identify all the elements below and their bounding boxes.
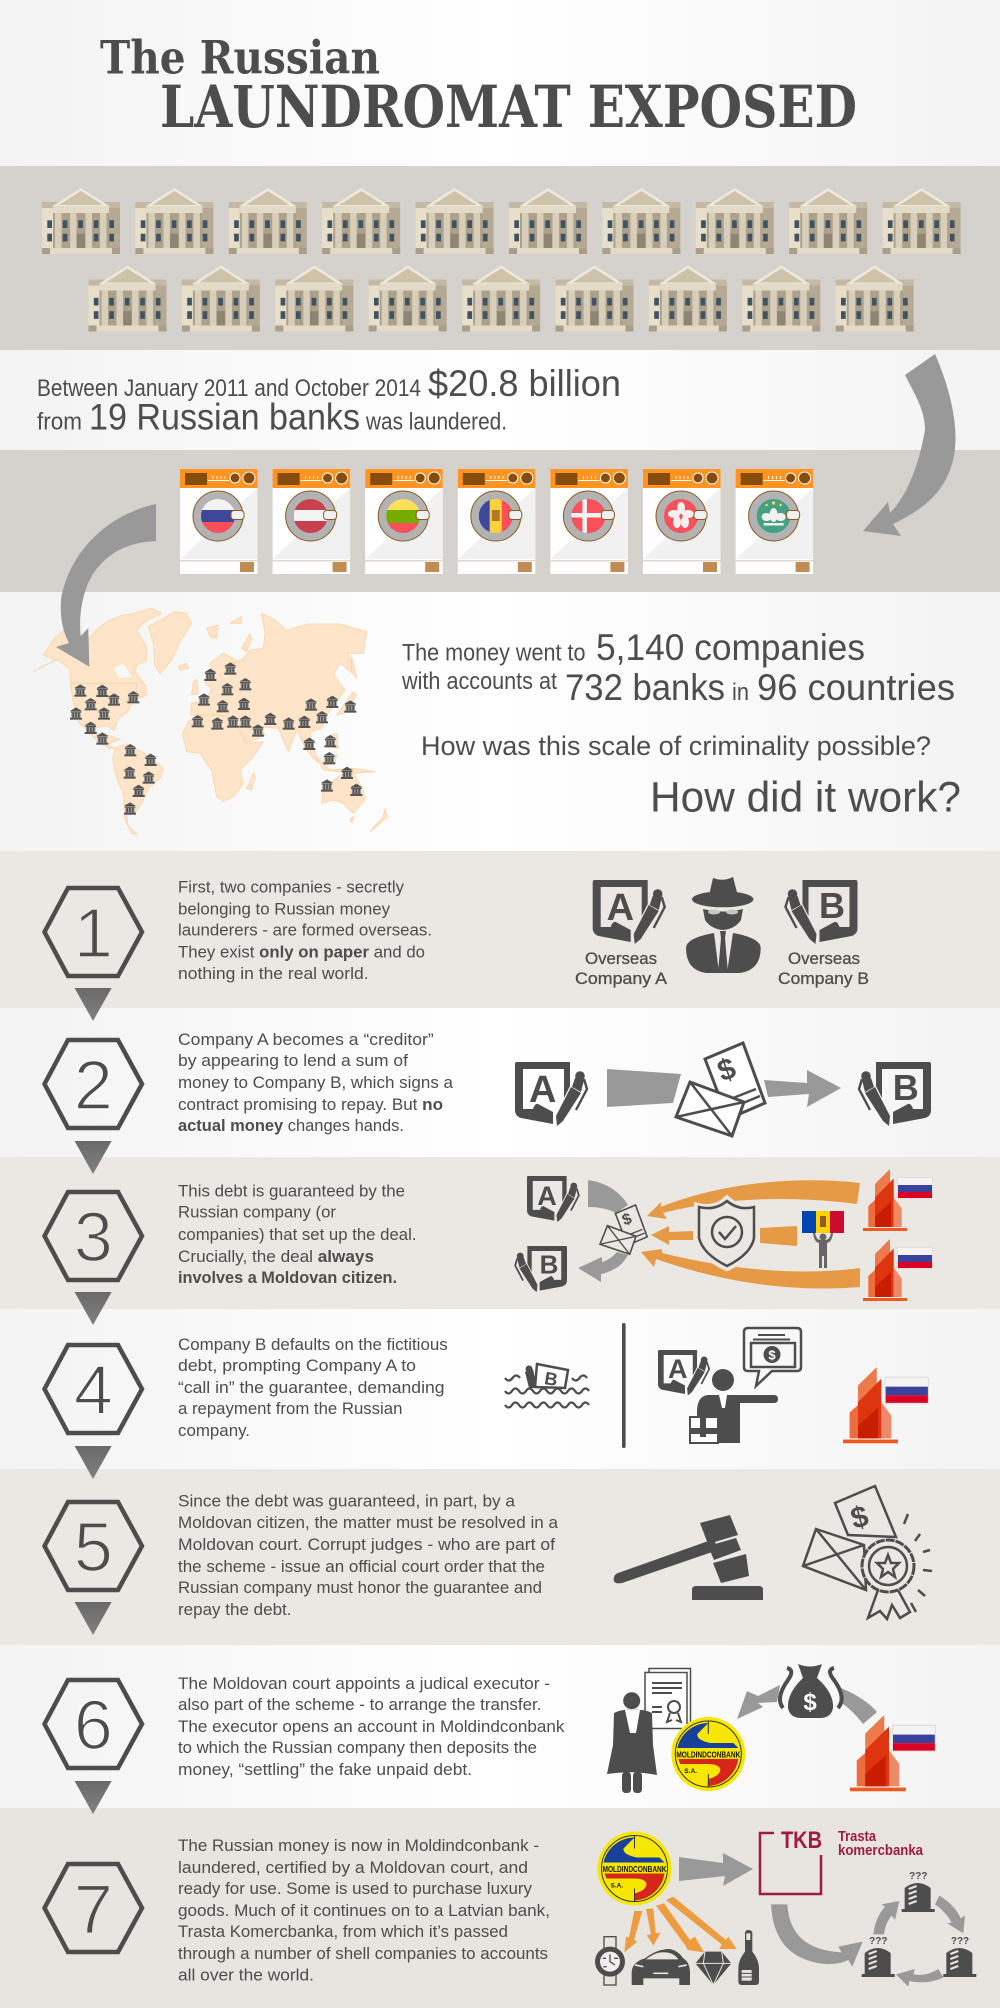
arrow: to company B: [764, 1070, 841, 1107]
step 4 text: company.: [178, 1421, 250, 1440]
step number 3: [44, 1192, 142, 1280]
step 1 text: belonging to Russian money: [178, 899, 390, 918]
icon: gavel: [614, 1515, 763, 1600]
step number 6: [44, 1680, 142, 1768]
icon: diamond: [695, 1952, 731, 1985]
step 7 text: [178, 1836, 550, 1985]
step 7 text: The Russian money is now in Moldindconbank -: [178, 1836, 539, 1855]
arrow: top guarantee: [647, 1180, 860, 1219]
icon: company A: A: [529, 1069, 556, 1111]
icon: Moldindconbank logo: S.A.: [610, 1882, 623, 1890]
step number 5: 5: [74, 1508, 113, 1586]
arrow: loan block: [607, 1069, 681, 1107]
step number 3: 3: [74, 1198, 113, 1276]
map bank markers: [70, 662, 362, 815]
step 7 text: all over the world.: [178, 1966, 314, 1985]
text block: companies, banks, countries: The money went to: [402, 640, 586, 667]
step 3 text: Crucially, the deal always: [178, 1247, 374, 1266]
arrow: grey from A: [588, 1180, 628, 1213]
step 2 text: contract promising to repay. But no: [178, 1095, 443, 1114]
world map: [33, 608, 387, 835]
title: LAUNDROMAT EXPOSED: [160, 73, 857, 141]
logo: Trasta Komercbanka: Trasta: [838, 1828, 877, 1845]
step 7 text: Trasta Komercbanka, from which it’s passed: [178, 1922, 508, 1941]
icon: company B: [859, 1062, 931, 1126]
icon: shell company left: ???: [869, 1936, 887, 1947]
step number 1: [44, 888, 142, 976]
step 7 text: goods. Much of it continues on to a Latvian bank,: [178, 1901, 550, 1920]
text block: questions: [421, 731, 961, 822]
step number 2: 2: [74, 1046, 113, 1124]
arrow: banks to washers: [863, 354, 955, 536]
icon: overseas company B: Company B: [778, 969, 869, 988]
icon: Moldindconbank logo: MOLDINDCONBANK: [603, 1865, 667, 1874]
step 1 text: launderers - are formed overseas.: [178, 921, 432, 940]
step 7 text: ready for use. Some is used to purchase luxury: [178, 1879, 532, 1898]
icon: shell company top: [902, 1871, 935, 1912]
icon: overseas company B: [778, 880, 869, 988]
washer: Russia: [180, 469, 258, 574]
icon: shell company left: [862, 1936, 895, 1977]
orange guarantee arrows: [641, 1180, 860, 1289]
icon: Russian company bottom: [863, 1239, 933, 1301]
icon: company B sinking: B: [543, 1368, 559, 1390]
title: The Russian: [100, 30, 380, 84]
step number 2: [44, 1040, 142, 1128]
icon: shell company right: [943, 1936, 976, 1977]
step 5 text: Moldovan citizen, the matter must be resolved in a: [178, 1513, 559, 1532]
panel: step 2: [44, 1030, 931, 1136]
step 5 text: [178, 1492, 559, 1619]
icon: Russian company: [850, 1715, 936, 1791]
step 2 text: by appearing to lend a sum of: [178, 1051, 408, 1070]
icon: company A: [658, 1350, 709, 1395]
washer: Lithuania: [365, 469, 443, 574]
step 4 text: [178, 1335, 448, 1440]
step 4 text: a repayment from the Russian: [178, 1399, 402, 1418]
title: [100, 30, 857, 141]
arrow: grey to B: [578, 1252, 628, 1282]
panel: step 5: [44, 1486, 932, 1619]
panel: seven washing machines with flags: [180, 469, 813, 574]
icon: overseas company A: Company A: [575, 969, 668, 988]
step number 7: [44, 1864, 142, 1952]
step 3 text: involves a Moldovan citizen.: [178, 1268, 397, 1287]
step 6 text: also part of the scheme - to arrange the transfer.: [178, 1695, 542, 1714]
icon: agent calling in guarantee: [690, 1369, 778, 1443]
icon: speech bubble with money: [744, 1328, 801, 1386]
icon: company A: A: [668, 1354, 687, 1384]
icon: company B: B: [540, 1250, 558, 1280]
step 3 text: This debt is guaranteed by the: [178, 1182, 405, 1201]
step 1 text: First, two companies - secretly: [178, 878, 404, 897]
arrow: big curve to shell companies: [771, 1904, 863, 1967]
step number 1: 1: [74, 894, 113, 972]
step 5 text: Russian company must honor the guarantee and: [178, 1578, 542, 1597]
icon: shell company top: ???: [909, 1871, 927, 1882]
step 6 text: [178, 1674, 565, 1779]
text block: questions: How was this scale of criminality possible?: [421, 731, 931, 761]
text block: companies, banks, countries: with accounts at: [401, 668, 557, 695]
text block: companies, banks, countries: in: [732, 679, 749, 706]
text block: amount laundered: 19 Russian banks: [89, 396, 360, 438]
text block: companies, banks, countries: 732 banks: [565, 667, 725, 708]
icon: envelope and cheque: [676, 1043, 765, 1136]
step number 5: [44, 1502, 142, 1590]
icon: company A: [527, 1176, 579, 1222]
step 6 text: The executor opens an account in Moldindconbank: [178, 1717, 565, 1736]
icon: Moldindconbank logo: MOLDINDCONBANK: [676, 1750, 740, 1760]
step 5 text: Moldovan court. Corrupt judges - who are part of: [178, 1535, 555, 1554]
logo: Trasta Komercbanka: komercbanka: [838, 1842, 924, 1859]
icon: overseas company B: B: [819, 885, 845, 926]
icon: car: [632, 1949, 690, 1985]
arrow: bottom guarantee: [641, 1249, 860, 1289]
panel: step 3: [44, 1169, 933, 1301]
text block: amount laundered: was laundered.: [365, 408, 507, 436]
icon: company B sinking: [505, 1364, 589, 1408]
step 2 text: [178, 1030, 454, 1135]
step 6 text: to which the Russian company then deposits the: [178, 1738, 537, 1757]
panel: step 6: [44, 1664, 936, 1793]
icon: Moldindconbank logo: [598, 1832, 672, 1906]
luxury goods and shell company diagram: [595, 1871, 976, 1987]
text block: companies, banks, countries: [401, 627, 955, 708]
icon: money bag: [780, 1664, 842, 1718]
text block: amount laundered: from: [37, 408, 82, 436]
icon: overseas company B: Overseas: [788, 949, 860, 968]
icon: shield with check: [698, 1200, 755, 1267]
icon: speech bubble with money: $: [768, 1348, 776, 1362]
step 1 text: They exist only on paper and do: [178, 943, 425, 962]
title section background: [0, 0, 1000, 166]
panel: 19 Russian banks: [42, 188, 961, 332]
icon: overseas company A: Overseas: [585, 949, 657, 968]
icon: company B: B: [893, 1067, 919, 1108]
icon: Moldindconbank logo: S.A.: [684, 1768, 697, 1775]
text block: companies, banks, countries: 96 countries: [757, 667, 955, 708]
logo: Trasta Komercbanka: TKB: [781, 1827, 822, 1854]
icon: company A: A: [537, 1181, 557, 1211]
washer: Hong Kong: [643, 469, 720, 574]
arrow: washers to world map: [56, 504, 156, 667]
step 4 text: debt, prompting Company A to: [178, 1356, 416, 1375]
washer: Denmark: [550, 469, 628, 574]
step number 4: 4: [74, 1351, 113, 1429]
step 6 text: The Moldovan court appoints a judical executor -: [178, 1674, 550, 1693]
icon: spy launderer: [686, 877, 761, 973]
icon: champagne bottle: [738, 1930, 759, 1985]
icon: Russian company: [843, 1367, 929, 1443]
step 4 text: “call in” the guarantee, demanding: [178, 1378, 444, 1397]
text block: amount laundered: Between January 2011 and October 2014: [37, 375, 421, 402]
block: citizen guarantee: [760, 1226, 797, 1246]
step 7 text: laundered, certified by a Moldovan court, and: [178, 1858, 528, 1877]
icon: Russian company top: [863, 1169, 933, 1231]
step number 6: 6: [74, 1686, 113, 1764]
step 6 text: money, “settling” the fake unpaid debt.: [178, 1760, 472, 1779]
icon: overseas company A: [575, 880, 668, 988]
step 3 text: [178, 1182, 416, 1287]
orange arrows to luxury goods: [624, 1897, 737, 1952]
divider line: [622, 1323, 626, 1448]
step 1 text: nothing in the real world.: [178, 964, 369, 983]
shell company cycle arrows: [873, 1896, 965, 1987]
arrows between steps: [75, 988, 112, 1814]
icon: envelope and cheque: [600, 1205, 647, 1254]
arrow: middle guarantee: [651, 1226, 693, 1245]
panel: step 7: [44, 1827, 976, 1987]
step 1 text: [178, 878, 432, 983]
icon: envelope and cheque: $: [713, 1052, 741, 1088]
icon: envelope, cheque and seal: [803, 1486, 932, 1619]
arrow: to Trasta Komercbanka: [679, 1853, 753, 1886]
icon: envelope, cheque and seal: $: [847, 1500, 872, 1536]
step 5 text: the scheme - issue an official court order that the: [178, 1557, 545, 1576]
arrow: money to bank: [737, 1685, 780, 1719]
icon: company B: [515, 1246, 567, 1292]
step 7 text: through a number of shell companies to accounts: [178, 1944, 548, 1963]
icon: court document: [645, 1668, 690, 1728]
text block: questions: How did it work?: [650, 774, 961, 822]
step 4 text: Company B defaults on the fictitious: [178, 1335, 448, 1354]
logo: Trasta Komercbanka: [760, 1827, 924, 1894]
icon: judicial executor: [607, 1692, 657, 1793]
washer: Macau: [736, 469, 813, 574]
step 2 text: money to Company B, which signs a: [178, 1073, 454, 1092]
icon: Moldindconbank logo: [671, 1717, 745, 1791]
panel: step 4: [44, 1323, 929, 1448]
step 5 text: Since the debt was guaranteed, in part, by a: [178, 1492, 516, 1511]
step number 7: 7: [74, 1870, 113, 1948]
text block: amount laundered: [37, 363, 621, 438]
step 3 text: Russian company (or: [178, 1203, 336, 1222]
panel: step 1: [44, 877, 869, 988]
step 2 text: Company A becomes a “creditor”: [178, 1030, 434, 1049]
icon: envelope and cheque: $: [620, 1210, 634, 1229]
washer: Latvia: [273, 469, 350, 574]
step number 4: [44, 1345, 142, 1433]
text block: companies, banks, countries: 5,140 companies: [596, 627, 865, 668]
icon: overseas company A: A: [607, 887, 634, 929]
step 3 text: companies) that set up the deal.: [178, 1225, 416, 1244]
icon: watch: [595, 1937, 625, 1985]
arrow: Russian company to money: [841, 1688, 877, 1724]
icon: money bag: $: [803, 1689, 817, 1716]
icon: company A: [515, 1062, 587, 1126]
text block: amount laundered: $20.8 billion: [428, 363, 621, 404]
step 5 text: repay the debt.: [178, 1600, 292, 1619]
step 2 text: actual money changes hands.: [178, 1116, 404, 1135]
icon: shell company right: ???: [951, 1936, 969, 1947]
icon: Moldovan citizen with flag: [802, 1211, 844, 1268]
washer: Moldova: [458, 469, 535, 574]
